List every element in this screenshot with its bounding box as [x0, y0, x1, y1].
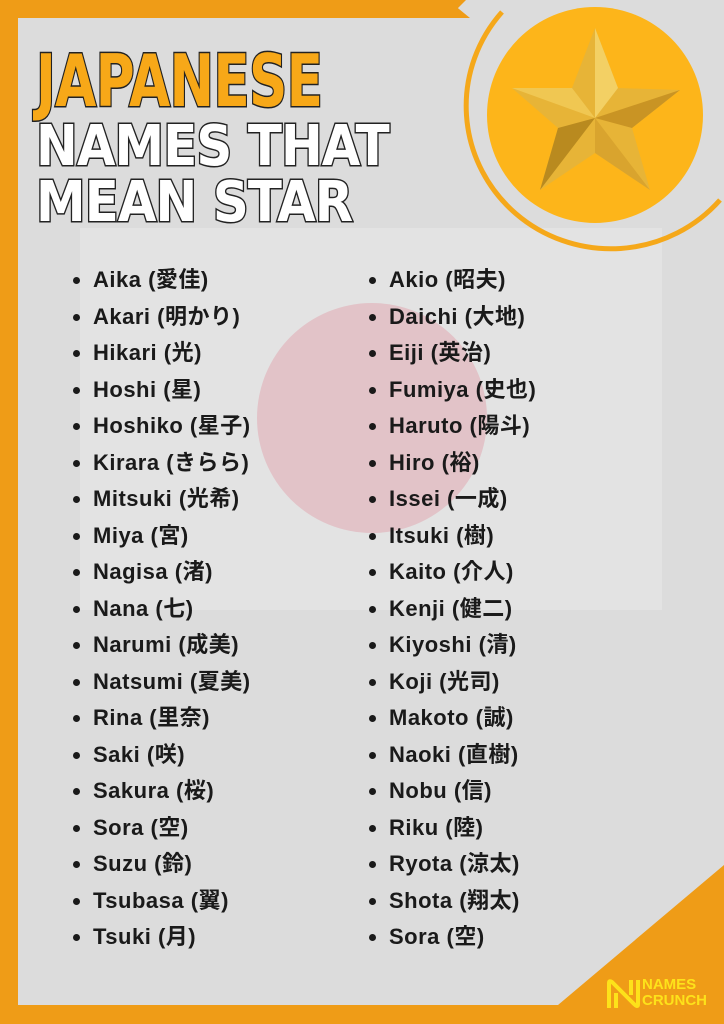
list: right column: Sora (空) [389, 924, 485, 949]
logo: names crunch [607, 976, 707, 1009]
list: left column: Narumi (成美) [93, 632, 239, 657]
list: right column: Shota (翔太) [389, 888, 520, 912]
title: NAMES THAT [36, 114, 389, 179]
list: left column: Sora (空) [93, 814, 189, 840]
list: right column: Eiji (英治) [389, 340, 491, 365]
list: right column: Makoto (誠) [389, 705, 514, 730]
list: right column: Riku (陸) [389, 814, 483, 840]
list: right column: Kaito (介人) [389, 559, 514, 584]
icon: gold star [512, 28, 680, 190]
list: left column: Saki (咲) [93, 742, 185, 766]
list: left column: Suzu (鈴) [93, 851, 192, 876]
pink sun circle [257, 303, 487, 533]
logo: names crunch: NAMES [642, 976, 696, 993]
list: left column [73, 267, 251, 949]
list background box [80, 228, 662, 610]
logo: names crunch: CRUNCH [642, 992, 707, 1009]
list: left column: Sakura (桜) [93, 778, 214, 803]
list: left column: Nagisa (渚) [93, 559, 213, 584]
list: right column: Naoki (直樹) [389, 742, 519, 766]
list: left column: Natsumi (夏美) [93, 668, 251, 694]
list: left column: Tsubasa (翼) [93, 888, 229, 912]
title: JAPANESE [36, 39, 322, 123]
list: right column: Fumiya (史也) [389, 376, 536, 402]
list: left column: Akari (明かり) [93, 304, 240, 328]
list: right column: Koji (光司) [389, 668, 500, 694]
title [32, 39, 391, 235]
list: left column: Rina (里奈) [93, 705, 210, 730]
list: right column: Haruto (陽斗) [389, 413, 530, 438]
list: right column [369, 267, 536, 949]
list: right column: Daichi (大地) [389, 304, 525, 328]
list: right column: Itsuki (樹) [389, 522, 494, 548]
list: left column: Tsuki (月) [93, 924, 196, 949]
list: right column: Issei (一成) [389, 486, 508, 511]
list: right column: Nobu (信) [389, 778, 492, 803]
list: right column: Kiyoshi (清) [389, 632, 517, 657]
list: left column: Hoshiko (星子) [93, 413, 251, 438]
list: left column: Hikari (光) [93, 340, 202, 365]
list: left column: Hoshi (星) [93, 376, 201, 402]
list: left column: Mitsuki (光希) [93, 486, 240, 511]
title: MEAN STAR [36, 170, 352, 235]
list: left column: Miya (宮) [93, 522, 189, 548]
list: right column: Kenji (健二) [389, 596, 513, 620]
list: right column: Ryota (涼太) [389, 851, 520, 876]
list: left column: Aika (愛佳) [93, 267, 209, 292]
list: left column: Nana (七) [93, 596, 194, 620]
list: right column: Hiro (裕) [389, 450, 480, 474]
list: left column: Kirara (きらら) [93, 450, 249, 474]
list: right column: Akio (昭夫) [389, 267, 506, 292]
star badge [464, 7, 722, 252]
